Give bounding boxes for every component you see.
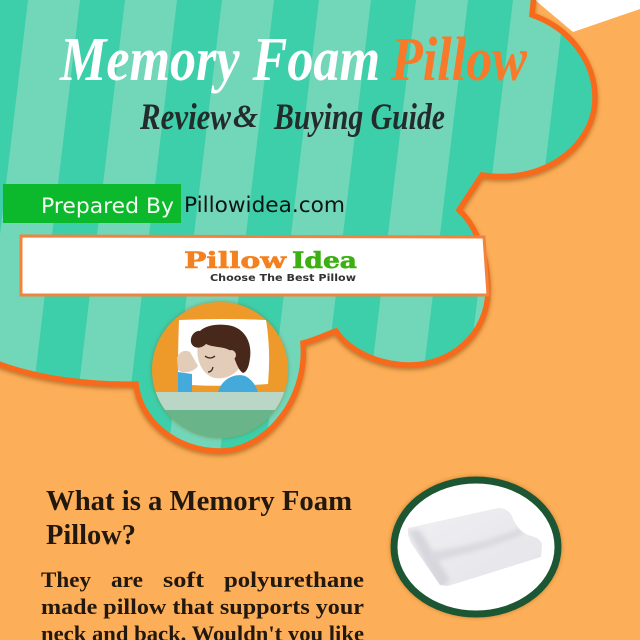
body [218, 375, 258, 392]
body line one [41, 567, 364, 592]
teal striped header panel [0, 0, 595, 451]
ear [230, 350, 236, 358]
title: pillow: Pillow [390, 26, 528, 94]
body paragraph [41, 567, 364, 640]
smile [208, 367, 213, 372]
memory foam pillow photo [394, 480, 558, 614]
face [197, 344, 239, 378]
white corner [535, 0, 640, 32]
body line one: polyurethane [224, 567, 364, 592]
contoured pillow [408, 508, 542, 586]
bed sheet [150, 392, 290, 410]
title [59, 26, 528, 138]
pillow [178, 319, 269, 386]
subtitle: ampersand: & [233, 99, 258, 135]
prepared by banner [3, 184, 345, 223]
heading line two: Pillow? [46, 520, 136, 551]
hair [191, 325, 250, 373]
site name: Pillowidea.com [184, 193, 345, 217]
body line one: are [111, 567, 143, 592]
image disc [152, 302, 288, 438]
logo box [21, 236, 488, 295]
heading line one: What is a Memory Foam [46, 486, 352, 517]
logo tagline: Choose The Best Pillow [210, 273, 356, 284]
logo word pillow: Pillow [184, 248, 287, 274]
prepared by text: Prepared By [41, 194, 174, 218]
title: memory foam: Memory Foam [59, 26, 380, 94]
logo panel [21, 236, 488, 295]
icon: sleeping person [150, 302, 290, 440]
pillow shading [409, 529, 522, 586]
bed blanket [165, 410, 275, 438]
hand [177, 351, 198, 372]
green label [3, 184, 181, 223]
subtitle: buying guide: Buying Guide [273, 97, 445, 138]
subtitle: review: Review [139, 97, 231, 138]
heading: what is a memory foam pillow [46, 486, 352, 551]
body line one: soft [163, 567, 205, 592]
photo frame [394, 480, 558, 614]
body line two: made pillow that supports your [41, 594, 364, 619]
left sleeve [178, 372, 192, 392]
closed eye [205, 356, 215, 358]
body line one: They [41, 567, 92, 592]
logo word idea: Idea [292, 248, 357, 274]
